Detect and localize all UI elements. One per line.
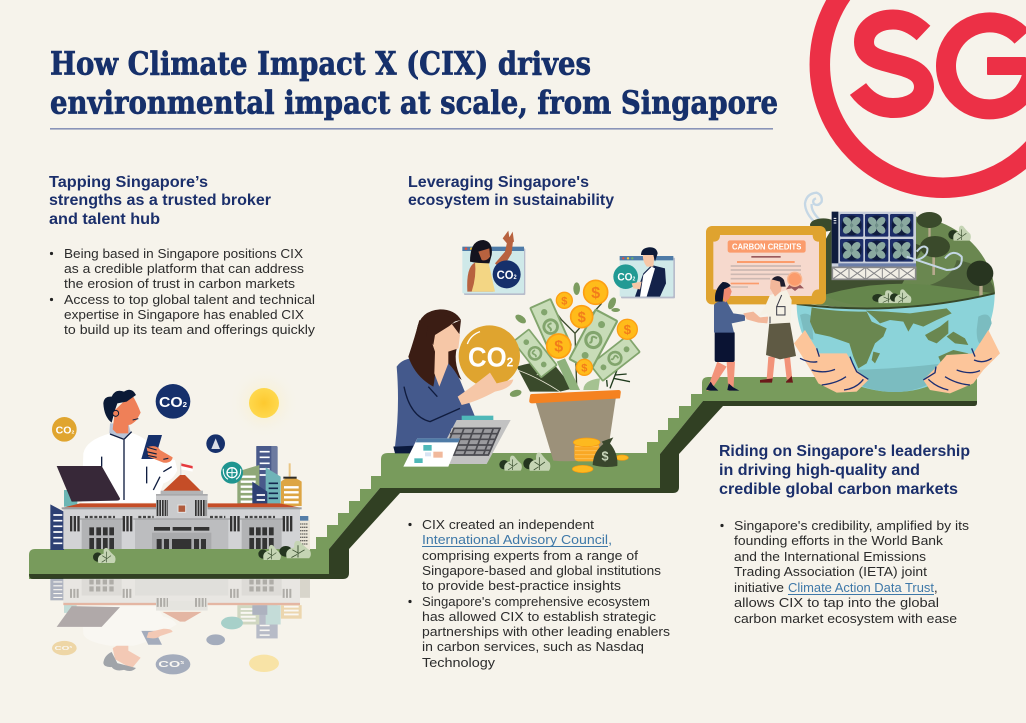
title — [50, 44, 778, 122]
illustration: reflection of Singapore scene — [50, 579, 310, 674]
video call window 1 — [462, 231, 525, 295]
text block: section 3 bullets: , — [934, 580, 938, 595]
bush — [279, 541, 311, 558]
text block: section 2 bullets: partnerships with other leading enablers — [422, 624, 671, 639]
wind swirl right — [907, 246, 962, 270]
person with phone and laptop — [57, 390, 177, 503]
text block: section 1 bullets: the erosion of trust in carbon markets — [64, 276, 296, 291]
illustration: reflection of Singapore scene: CO2 — [54, 645, 73, 651]
stairs from platform 1 to platform 2 — [316, 453, 660, 579]
coins: $ — [591, 285, 600, 302]
text block: section 3 bullets: initiative — [734, 580, 784, 595]
trees — [810, 212, 993, 297]
heading: section 1: strengths as a trusted broker — [49, 192, 271, 209]
bush — [258, 545, 281, 560]
plant leaves — [509, 282, 630, 398]
tablet keyboard — [433, 416, 511, 464]
text block: section 2 bullets: International Advisory Council, — [422, 532, 612, 547]
coins: $ — [581, 362, 587, 374]
heading: section 3 — [719, 443, 970, 498]
text block: section 1 bullets — [50, 246, 316, 337]
text block: section 2 bullets — [408, 517, 671, 670]
woman holding CO2 sphere — [393, 309, 520, 453]
certificate — [706, 226, 826, 304]
banknotes — [513, 299, 640, 390]
text block: section 3 bullets: allows CIX to tap into the global — [734, 595, 939, 610]
businesswoman left — [706, 282, 745, 391]
text block: section 3 bullets: founding efforts in the World Bank — [734, 533, 944, 548]
icon: navy emblem — [206, 434, 225, 453]
title rule — [50, 128, 773, 130]
handshake — [743, 312, 768, 323]
text block: section 1 bullets: Access to top global talent and technical — [64, 292, 315, 307]
title: environmental impact at scale, from Singapore — [50, 84, 778, 122]
text block: section 3 bullets: and the International Emissions — [734, 549, 927, 564]
text block: section 2 bullets: to provide best-practice insights — [422, 578, 622, 593]
coins: $ — [578, 310, 586, 326]
heading: section 3: in driving high-quality and — [719, 462, 920, 479]
text block: section 3 bullets — [720, 518, 970, 626]
plant stems — [557, 303, 602, 387]
bush — [499, 456, 522, 471]
text block: section 1 bullets: as a credible platform that can address — [64, 261, 305, 276]
coin stack and money bag: $ — [601, 450, 609, 464]
carbon capture fan unit — [832, 212, 916, 279]
sun — [229, 368, 299, 438]
text block: section 2 bullets: in carbon services, such as Nasdaq — [422, 639, 644, 654]
businesswoman right — [758, 276, 796, 383]
heading: section 2: Leveraging Singapore's — [408, 174, 589, 191]
illustration: ecosystem scene — [393, 231, 675, 473]
calendar — [403, 438, 460, 467]
hand right — [923, 330, 1000, 393]
text block: section 1 bullets: to build up its team and offerings quickly — [64, 322, 316, 337]
colonial building — [62, 475, 302, 549]
text block: section 3 bullets: carbon market ecosystem with ease — [734, 611, 957, 626]
CO2 bubble gold: CO2 — [56, 425, 75, 436]
plant pot — [529, 390, 621, 461]
illustration: reflection of Singapore scene: CO2 — [158, 659, 185, 669]
title: How Climate Impact X (CIX) drives — [50, 44, 591, 82]
coins: $ — [554, 339, 563, 356]
coin stack and money bag — [572, 437, 628, 473]
text block: section 2 bullets: Technology — [422, 655, 496, 670]
flag — [180, 462, 193, 476]
text block: section 3 bullets: Climate Action Data Trust — [788, 580, 934, 595]
staircase platforms — [29, 377, 977, 579]
video call window 2 — [613, 247, 675, 298]
coins: $ — [624, 322, 632, 337]
wind swirl left — [805, 193, 822, 223]
bush — [523, 453, 550, 471]
bush — [93, 548, 116, 563]
heading: section 1: Tapping Singapore’s — [49, 174, 208, 191]
certificate: CARBON CREDITS — [732, 243, 802, 252]
globe ocean — [797, 293, 995, 392]
text block: section 2 bullets: Singapore's comprehensive ecosystem — [422, 594, 650, 609]
text block: section 2 bullets: has allowed CIX to establish strategic — [422, 609, 657, 624]
text block: section 3 bullets: Singapore's credibility, amplified by its — [734, 518, 970, 533]
CO2 bubble navy: CO2 — [159, 395, 187, 411]
illustration: global carbon market scene — [706, 193, 1000, 393]
heading: section 1: and talent hub — [49, 211, 160, 228]
continents — [810, 307, 968, 368]
text block: section 3 bullets: Trading Association (IETA) joint — [734, 564, 927, 579]
heading: section 1 — [49, 174, 271, 228]
video call window 1: CO2 — [497, 268, 517, 282]
coins: $ — [561, 295, 567, 307]
CO2 bubble gold — [52, 417, 77, 442]
heading: section 3: Riding on Singapore's leadership — [719, 443, 970, 460]
illustration: Singapore scene — [50, 368, 311, 563]
video call window 2: CO2 — [617, 272, 635, 284]
logo: SG in red ring — [820, 0, 1026, 188]
CO2 bubble navy — [156, 384, 190, 419]
stairs from platform 2 to platform 3 — [647, 377, 977, 493]
heading: section 2 — [408, 174, 614, 209]
text block: section 2 bullets: Singapore-based and global institutions — [422, 563, 662, 578]
dome land on globe — [798, 216, 995, 312]
bushes on dome — [872, 226, 971, 303]
icon: teal globe emblem — [221, 462, 243, 484]
text block: section 1 bullets: Being based in Singapore positions CIX — [64, 246, 303, 261]
text block: section 2 bullets: CIX created an independent — [422, 517, 594, 532]
heading: section 2: ecosystem in sustainability — [408, 192, 614, 209]
woman holding CO2 sphere: CO2 — [468, 342, 513, 373]
hand left — [794, 330, 868, 393]
coins — [547, 280, 637, 375]
platform 1 — [29, 549, 329, 579]
text block: section 1 bullets: expertise in Singapore has enabled CIX — [64, 307, 304, 322]
skyline — [50, 446, 310, 550]
text block: section 2 bullets: comprising experts from a range of — [422, 548, 638, 563]
heading: section 3: credible global carbon markets — [719, 481, 958, 498]
